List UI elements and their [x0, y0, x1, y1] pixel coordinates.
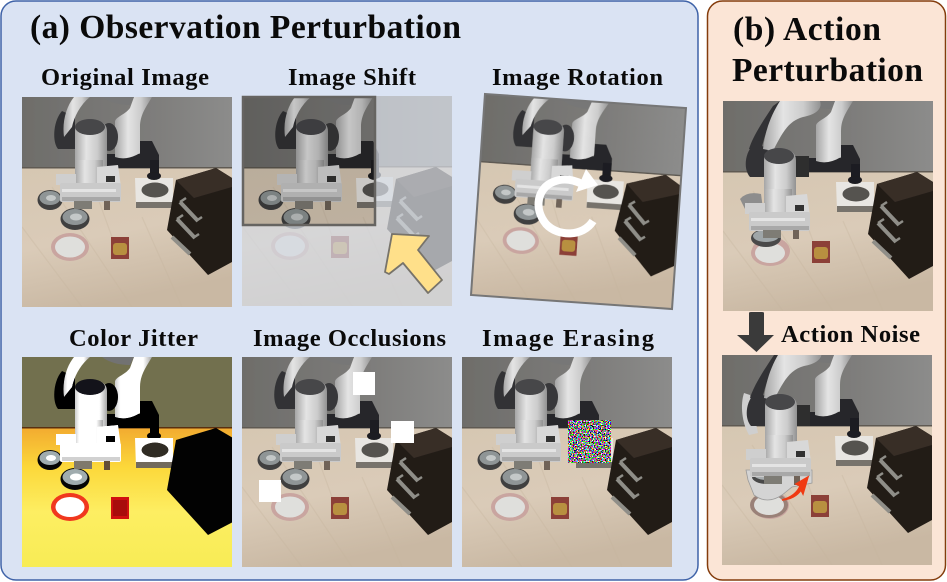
image: original scene — [22, 97, 232, 307]
heading: action perturbation: Perturbation — [732, 52, 923, 89]
image: shifted scene — [242, 96, 453, 307]
image: action noise — [722, 350, 932, 565]
heading: image shift: Image Shift — [288, 64, 417, 91]
image: erased scene — [462, 357, 672, 567]
heading: action perturbation: (b) Action — [733, 11, 881, 48]
heading: color jitter: Color Jitter — [69, 325, 198, 352]
heading: observation perturbation: (a) Observation Perturbation — [30, 9, 461, 46]
occlusion: white squares — [259, 372, 414, 502]
image: occluded scene — [242, 357, 452, 567]
icon: red motion arrow — [782, 477, 808, 500]
icon: down arrow — [737, 312, 774, 352]
ghost: target gripper — [746, 470, 812, 500]
heading: image erasing: Image Erasing — [482, 325, 655, 352]
panel: action perturbation — [708, 1, 946, 580]
image: rotated scene — [471, 94, 686, 309]
icon: yellow shift arrow — [385, 234, 442, 293]
image: color jitter scene — [22, 357, 233, 568]
heading: image occlusions: Image Occlusions — [253, 325, 446, 352]
panel: observation perturbation — [1, 1, 698, 580]
heading: original image: Original Image — [41, 64, 209, 91]
icon: rotation arrow — [539, 169, 598, 233]
noise patch — [568, 420, 611, 463]
heading: image rotation: Image Rotation — [492, 64, 663, 91]
image: nominal action — [723, 101, 933, 311]
heading: action noise: Action Noise — [781, 321, 920, 348]
